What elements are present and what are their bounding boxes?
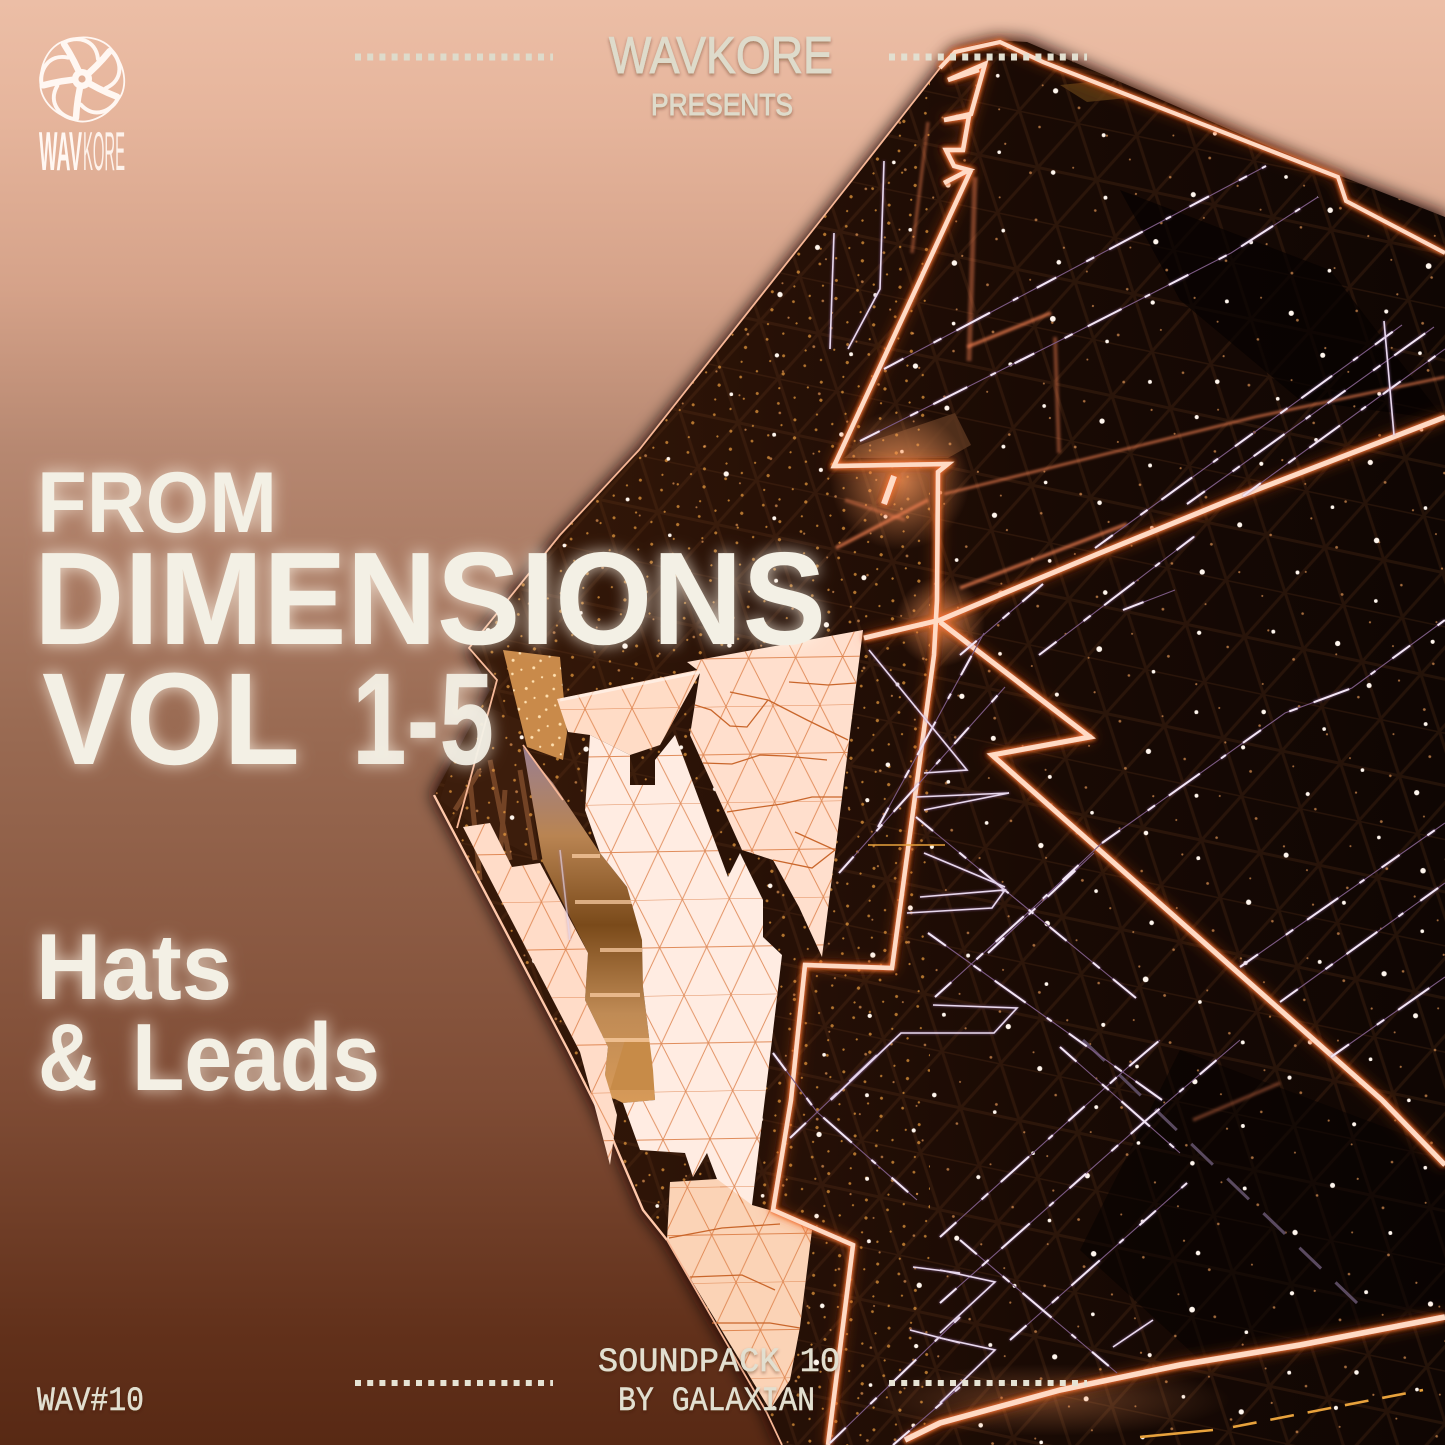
glowing orange ridge lines [773,42,1445,1445]
title: FROM DIMENSIONS VOL 1-5: 1-5 [352,645,494,792]
pale mesh panels [463,630,863,1410]
logo: WAVKORE emblem [32,37,131,131]
logo wordmark: WAV [39,120,82,182]
mesh lines [687,630,863,957]
amber streaks [868,845,1423,1437]
emblem petal 2 [76,48,131,108]
top right dotted rule [889,54,1087,60]
title: FROM DIMENSIONS VOL 1-5 [34,455,826,792]
crystal drop shadow [434,40,1445,1445]
emblem petal 1 [63,37,113,79]
title: FROM DIMENSIONS VOL 1-5: VOL [42,645,300,792]
subtitle: Hats & Leads: & [38,1004,98,1111]
lavender angular shapes [560,161,1394,1403]
header: WAVKORE PRESENTS: WAVKORE [609,27,833,85]
crystal lower left outline [434,795,667,1240]
text: KORE [83,120,125,182]
title: FROM DIMENSIONS VOL 1-5: DIMENSIONS [34,525,826,672]
subtitle: Hats & Leads: Leads [132,1004,380,1111]
title: FROM DIMENSIONS VOL 1-5: FROM [37,455,277,551]
credit: SOUNDPACK 10 BY GALAXIAN: BY GALAXIAN [618,1383,815,1421]
crystal upper outline [457,68,940,1445]
lavender sparkle lines: dim thread [773,166,1445,1445]
ochre band [503,650,567,760]
top left dotted rule [355,54,553,60]
credit: SOUNDPACK 10 BY GALAXIAN: SOUNDPACK 10 [598,1344,840,1382]
emblem petal 4 [32,61,97,124]
credit: SOUNDPACK 10 BY GALAXIAN [598,1344,840,1421]
bottom left dotted rule [355,1380,553,1386]
emblem petal 5 [37,37,92,97]
subtitle: Hats & Leads [36,914,380,1111]
emblem petal 3 [57,68,122,131]
emblem hub [72,69,92,89]
crystal artwork [430,30,1445,1445]
faint orange streaks [836,122,1445,1120]
catalogue number: WAV#10 [37,1383,144,1421]
header: WAVKORE PRESENTS [609,27,833,122]
lavender sparkle lines: bright segments [773,166,1445,1445]
header: WAVKORE PRESENTS: PRESENTS [651,87,793,122]
subtitle: Hats & Leads: Hats [36,914,232,1019]
crystal dark body [430,30,1445,1445]
bottom right dotted rule [889,1380,1087,1386]
band horizontal streaks [572,856,655,1040]
